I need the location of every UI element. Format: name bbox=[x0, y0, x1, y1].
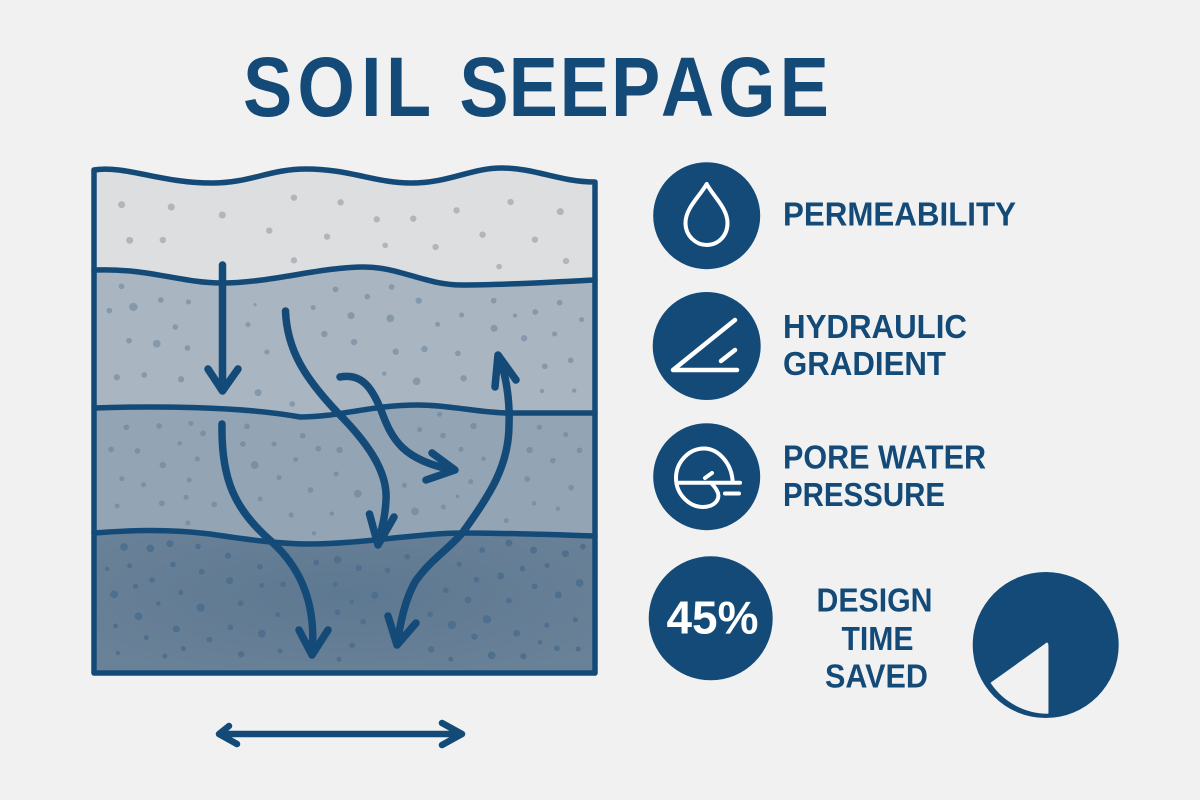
label: design time saved: SAVED bbox=[825, 658, 928, 694]
soil layer 1: topsoil bbox=[94, 168, 595, 295]
item: pore water pressure bbox=[653, 423, 986, 530]
arrow: curve returning upward bbox=[388, 355, 516, 645]
soil layer 4: deepest bbox=[94, 530, 595, 673]
panel: soil cross-section diagram bbox=[94, 168, 595, 673]
title: SOIL SEEPAGE bbox=[243, 40, 829, 134]
soil layer 2 bbox=[94, 267, 595, 425]
icon: pressure gauge bbox=[653, 423, 760, 530]
arrow: curve into deepest layer bbox=[222, 424, 328, 655]
label: design time saved: DESIGN bbox=[816, 582, 932, 618]
icon: slope bbox=[653, 292, 761, 400]
soil particles: layer 1 bbox=[119, 195, 569, 269]
soil particles: layer 4 bbox=[105, 540, 585, 661]
label: design time saved bbox=[816, 582, 932, 694]
icon: water drop bbox=[653, 162, 760, 269]
label: pore water pressure: PRESSURE bbox=[783, 476, 945, 513]
stat: 45 percent badge bbox=[649, 556, 773, 680]
label: hydraulic gradient bbox=[783, 308, 967, 382]
label: design time saved: TIME bbox=[842, 620, 914, 657]
label: permeability: PERMEABILITY bbox=[783, 196, 1016, 232]
arrow: horizontal double-headed bbox=[219, 723, 462, 745]
chart: pie showing time saved bbox=[973, 572, 1119, 718]
item: permeability bbox=[653, 162, 1016, 269]
stat: 45 percent badge: 45% bbox=[666, 592, 758, 644]
item: hydraulic gradient bbox=[653, 292, 967, 400]
soil particles: layer 2 bbox=[107, 284, 584, 406]
layer boundary lines and frame bbox=[94, 168, 595, 673]
soil particles: layer 3 bbox=[109, 412, 582, 535]
arrow: straight down bbox=[208, 265, 238, 391]
label: pore water pressure: PORE WATER bbox=[783, 438, 986, 476]
label: pore water pressure bbox=[783, 438, 986, 513]
label: hydraulic gradient: HYDRAULIC bbox=[783, 308, 967, 345]
label: hydraulic gradient: GRADIENT bbox=[783, 345, 946, 382]
seepage flow arrows bbox=[208, 265, 516, 655]
arrow: long curve into third layer bbox=[286, 311, 394, 545]
arrow: short curve to the right bbox=[340, 376, 455, 480]
soil layer 3 bbox=[94, 405, 595, 552]
